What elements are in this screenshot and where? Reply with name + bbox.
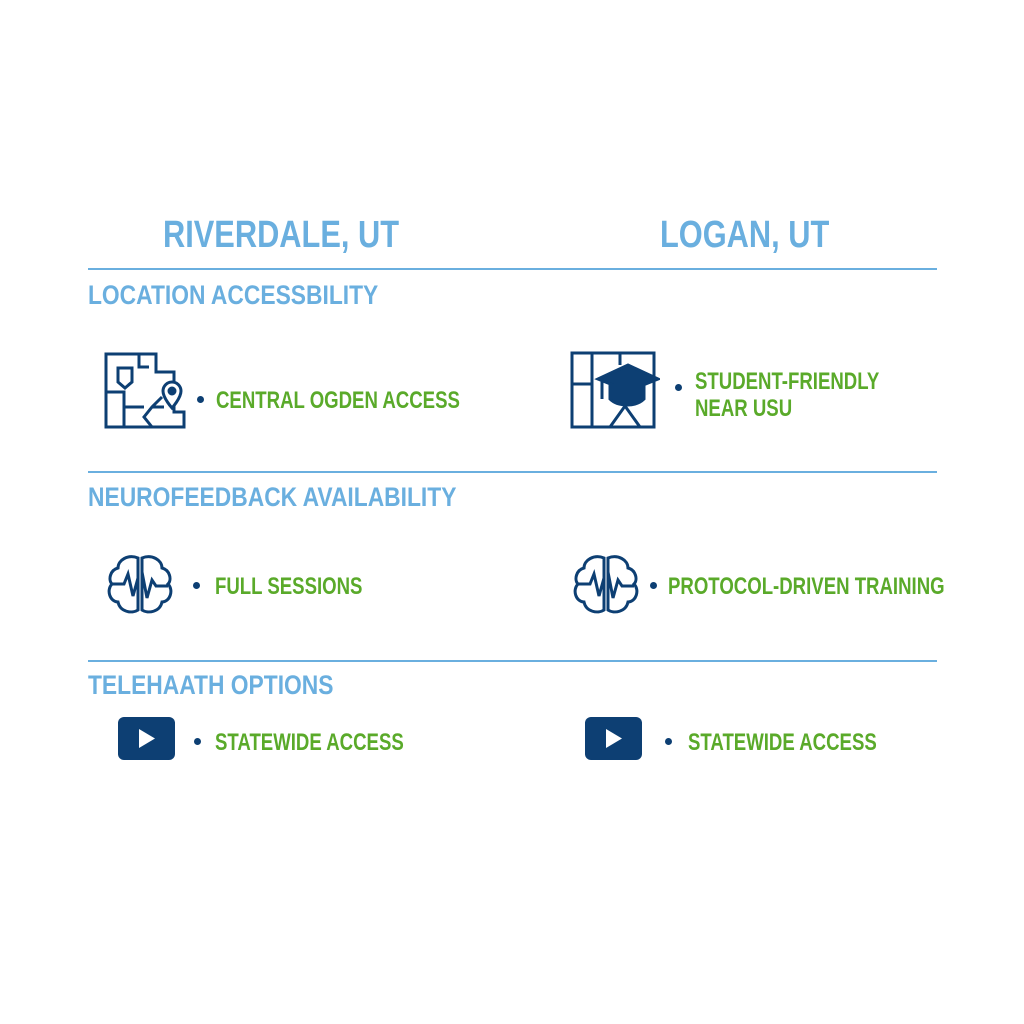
title: Riverdale: RIVERDALE, UT	[163, 214, 399, 256]
icon: brain 1	[108, 555, 172, 614]
text: statewide access 2: STATEWIDE ACCESS	[688, 729, 877, 756]
text: central ogden access: CENTRAL OGDEN ACCESS	[216, 387, 460, 414]
text: student-friendly near USU: NEAR USU	[695, 395, 792, 422]
title: Logan: LOGAN, UT	[660, 214, 829, 256]
heading: neurofeedback availability: NEUROFEEDBACK AVAILABILITY	[88, 482, 456, 512]
text: student-friendly near USU	[695, 368, 879, 422]
icon: map with graduation cap	[570, 352, 660, 428]
text: full sessions: FULL SESSIONS	[215, 573, 362, 600]
icon: play button 1	[118, 717, 175, 760]
heading: telehealth options: TELEHAATH OPTIONS	[88, 670, 333, 700]
text: statewide access 1: STATEWIDE ACCESS	[215, 729, 404, 756]
text: protocol-driven training: PROTOCOL-DRIVEN TRAINING	[668, 573, 945, 600]
heading: location accessibility: LOCATION ACCESSBILITY	[88, 280, 378, 310]
icon: map with pin	[104, 352, 186, 428]
text: student-friendly near USU: STUDENT-FRIENDLY	[695, 368, 879, 395]
icon: play button 2	[585, 717, 642, 760]
icon: brain 2	[574, 555, 638, 614]
